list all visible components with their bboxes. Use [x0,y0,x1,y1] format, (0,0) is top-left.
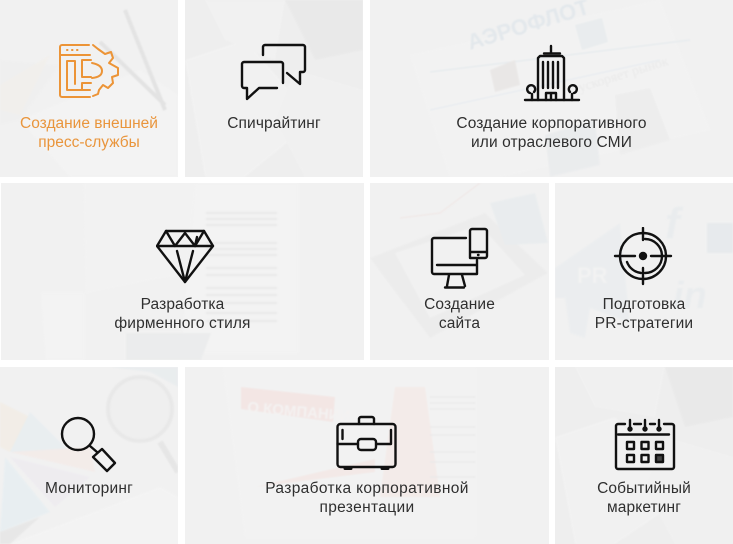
icon: calendar [614,418,676,470]
panel: press service [0,0,178,177]
label: brand identity: фирменного стиля [114,315,251,332]
label: corporate media [456,115,647,151]
panel: corporate media [370,0,733,177]
panel: corporate media: ускоряет рынок [577,54,671,96]
label: PR strategy: Подготовка [603,296,685,313]
label: corporate media: Создание корпоративного [456,115,647,132]
icon: briefcase [336,416,397,470]
panel: speechwriting [185,0,363,177]
panel: corporate presentation: О КОМПАНИИ [247,399,351,425]
icon: web page with gear [59,44,119,98]
label: brand identity [114,296,251,332]
label: event marketing: маркетинг [607,499,681,516]
panel: PR strategy [555,183,733,360]
label: corporate presentation: Разработка корпоративной [265,480,469,497]
label: website: сайта [439,315,480,332]
label: corporate presentation: презентации [319,499,415,516]
icon: office tower [524,44,580,102]
panel: corporate presentation [185,367,549,544]
label: speechwriting: Спичрайтинг [227,115,321,132]
panel: monitoring [0,367,178,544]
label: website: Создание [424,296,495,313]
panel: PR strategy: f [665,199,684,248]
label: event marketing: Событийный [597,480,691,497]
label: press service: Создание внешней [20,115,158,132]
label: corporate presentation [265,480,469,516]
panel: website [370,183,549,360]
icon: speech bubbles [240,44,306,100]
panel: event marketing [555,367,733,544]
panel: brand identity [1,183,364,360]
label: press service: пресс-службы [38,134,140,151]
label: press service [20,115,158,151]
label: corporate media: или отраслевого СМИ [471,134,632,151]
panel: PR strategy: in [673,275,707,317]
panel: PR strategy: PR [577,263,608,288]
label: website [424,296,495,332]
label: PR strategy: PR-стратегии [595,315,693,332]
icon: crosshair target [614,227,672,286]
label: brand identity: Разработка [141,296,224,313]
icon: diamond [156,230,214,284]
label: event marketing [597,480,691,516]
label: monitoring: Мониторинг [45,480,133,497]
label: PR strategy [595,296,693,332]
icon: magnifying glass [60,416,116,472]
icon: computer and phone [430,228,488,289]
